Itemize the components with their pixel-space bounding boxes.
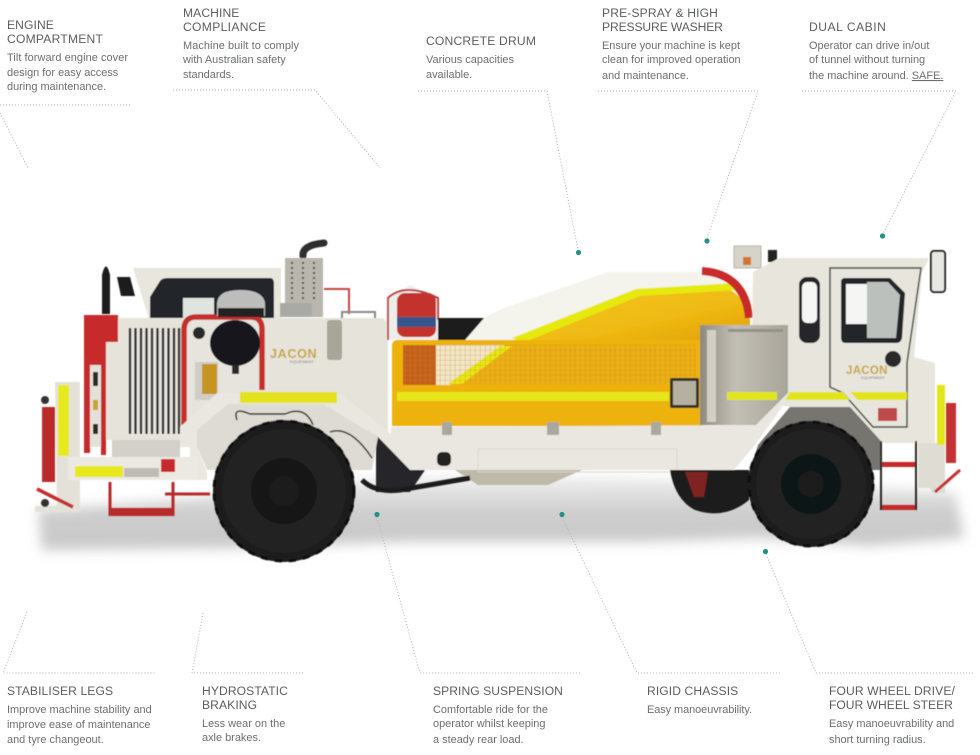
callout: four wheel drive and steer: Easy manoeuvrability and <box>829 718 954 730</box>
callout: spring suspension: Comfortable ride for the <box>433 704 548 716</box>
callout: stabiliser legs: Improve machine stability and <box>7 704 152 716</box>
arch wiring <box>236 411 372 458</box>
machine illustration <box>35 243 960 562</box>
rear wheel <box>213 420 355 562</box>
callout: pre-spray and high pressure washer: PRE-SPRAY & HIGH <box>602 6 718 20</box>
callout: machine compliance: with Australian safety <box>182 54 286 66</box>
rear red post <box>84 266 118 455</box>
cab door <box>830 268 921 427</box>
callout: spring suspension <box>374 512 580 746</box>
callout: spring suspension: SPRING SUSPENSION <box>433 684 563 698</box>
callout: machine compliance <box>173 6 380 168</box>
callout: stabiliser legs <box>3 612 155 746</box>
callout: engine compartment: design for easy access <box>7 67 119 79</box>
callout: pre-spray and high pressure washer: Ensure your machine is kept <box>602 40 740 52</box>
callout: machine compliance: MACHINE <box>183 6 239 20</box>
chassis embossed panel <box>478 449 677 472</box>
callout: concrete drum: Various capacities <box>426 54 514 66</box>
engine access panel and red guard <box>184 290 265 425</box>
callout: dual cabin: Operator can drive in/out <box>809 40 929 52</box>
callout: hydrostatic braking <box>192 613 303 744</box>
front ladder <box>881 441 916 510</box>
callout: rigid chassis: Easy manoeuvrability. <box>647 704 752 716</box>
sticker <box>878 408 897 421</box>
callout: dual cabin: the machine around. SAFE. <box>809 70 943 82</box>
callout: hydrostatic braking: BRAKING <box>202 698 257 712</box>
callout: machine compliance: standards. <box>183 69 234 81</box>
front cab: EQUIPMENT <box>861 375 885 380</box>
front wheel <box>748 421 874 547</box>
callout: four wheel drive and steer: FOUR WHEEL DRIVE/ <box>829 684 956 698</box>
callout: four wheel drive and steer <box>763 549 975 746</box>
callout: hydrostatic braking: axle brakes. <box>202 732 261 744</box>
callout: stabiliser legs: STABILISER LEGS <box>7 684 113 698</box>
callout: machine compliance: Machine built to comply <box>183 40 300 52</box>
yellow reflective strip rear guard <box>240 392 337 403</box>
drum red ring <box>702 271 749 318</box>
ground shadow <box>38 476 964 550</box>
JACON logo rear: JACON <box>270 347 317 361</box>
callout: four wheel drive and steer: short turning radius. <box>829 734 926 746</box>
callout: pre-spray and high pressure washer: and maintenance. <box>602 70 689 82</box>
yellow guard panel <box>392 340 703 426</box>
callout: engine compartment: Tilt forward engine cover <box>7 52 128 64</box>
underbody hose and drive line <box>362 470 582 491</box>
front stabiliser leg <box>918 385 960 493</box>
tread plate step <box>112 440 180 458</box>
lime strips on cab <box>727 392 907 400</box>
chassis <box>391 393 792 470</box>
dark machinery behind chassis <box>376 436 425 492</box>
callout: pre-spray and high pressure washer <box>598 6 758 244</box>
callout: stabiliser legs: and tyre changeout. <box>7 734 104 746</box>
drum <box>465 271 750 343</box>
fire extinguisher <box>386 285 484 340</box>
callout: rigid chassis: RIGID CHASSIS <box>647 684 738 698</box>
rear ladder <box>110 482 210 516</box>
oil filter <box>195 362 218 400</box>
callout: hydrostatic braking: Less wear on the <box>202 718 285 730</box>
stainless washer tank <box>700 325 788 425</box>
callout: stabiliser legs: improve ease of maintenance <box>7 719 150 731</box>
front wheel arch <box>750 407 880 470</box>
washer beacon <box>734 246 777 268</box>
body latch <box>327 320 342 360</box>
cab door window <box>841 278 905 343</box>
callout: spring suspension: a steady rear load. <box>433 734 524 746</box>
callout: engine compartment: during maintenance. <box>7 81 106 93</box>
callout: engine compartment <box>0 18 130 168</box>
callout: engine compartment: COMPARTMENT <box>7 32 104 46</box>
front cab <box>751 251 945 443</box>
door handle <box>885 351 901 367</box>
callout: pre-spray and high pressure washer: clean for improved operation <box>602 54 741 66</box>
cab small window <box>799 277 820 343</box>
callout: pre-spray and high pressure washer: PRESSURE WASHER <box>602 20 723 34</box>
callout: machine compliance: COMPLIANCE <box>183 20 266 34</box>
callout: engine compartment: ENGINE <box>7 18 54 32</box>
callout: spring suspension: operator whilst keeping <box>433 718 545 730</box>
callout: dual cabin: DUAL CABIN <box>809 20 886 34</box>
callout: four wheel drive and steer: FOUR WHEEL STEER <box>829 698 953 712</box>
rear mudguard <box>180 393 424 480</box>
callout: concrete drum: CONCRETE DRUM <box>426 34 536 48</box>
callout: concrete drum: available. <box>426 69 472 81</box>
second wheel behind <box>670 470 749 513</box>
air filter <box>210 320 260 366</box>
chassis port <box>437 452 451 466</box>
rear wheel arch inner <box>197 404 378 470</box>
rear platform plate with strip <box>68 457 197 480</box>
mirror <box>931 251 945 292</box>
body hinges <box>442 422 661 435</box>
engine louvres <box>127 328 180 435</box>
callout: dual cabin: of tunnel without turning <box>809 54 925 66</box>
rear cabin <box>117 268 281 322</box>
callout: concrete drum <box>418 34 581 255</box>
callout: hydrostatic braking: HYDROSTATIC <box>202 684 288 698</box>
callout: rigid chassis <box>559 512 780 716</box>
exhaust stack <box>280 243 375 320</box>
JACON logo rear: EQUIPMENT <box>290 359 314 364</box>
callout: dual cabin <box>802 20 956 239</box>
JACON logo front: JACON <box>846 365 888 377</box>
engine body <box>106 318 388 440</box>
rear stabiliser leg <box>35 382 80 512</box>
